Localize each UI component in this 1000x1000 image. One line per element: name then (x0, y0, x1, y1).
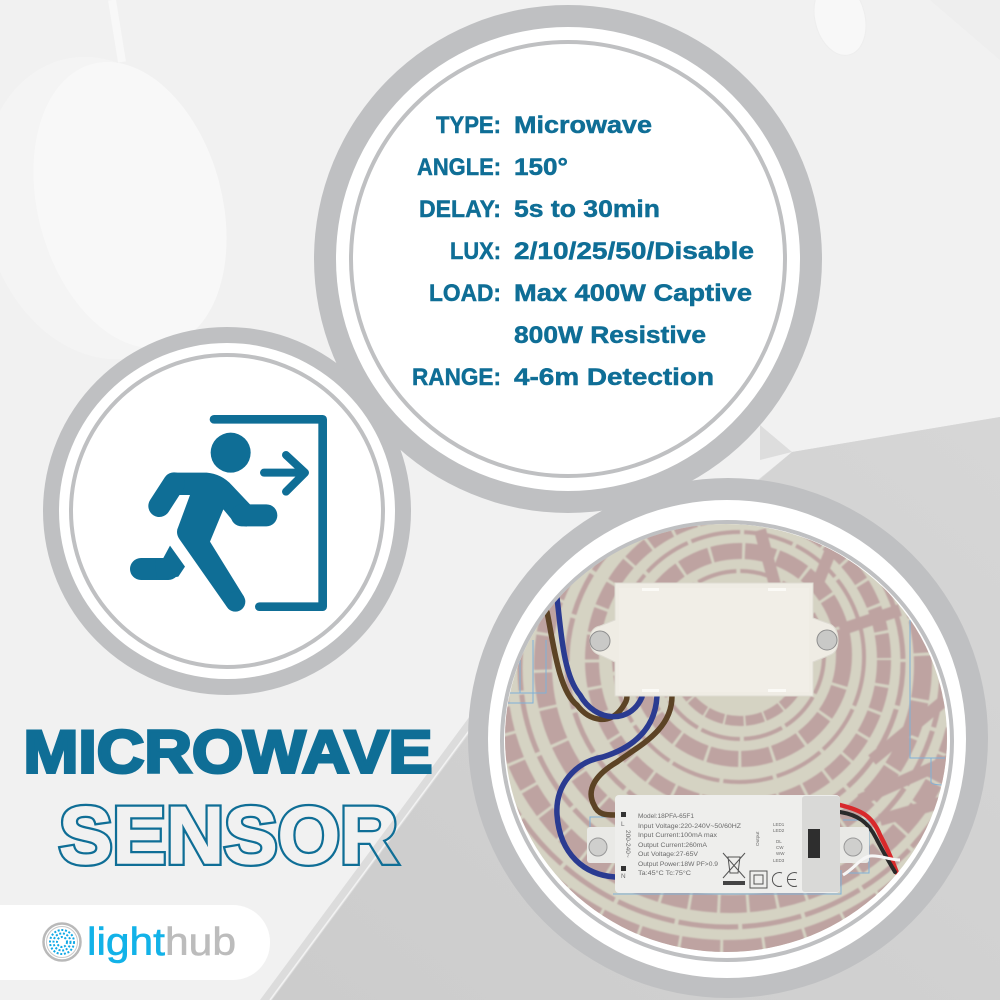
icon: running person leaving through door (141, 419, 323, 612)
panel: exit icon circle (43, 327, 411, 695)
specification labels: ANGLE: (417, 154, 501, 181)
driver label text: LED2 (773, 828, 785, 833)
driver label text: LED1 (773, 822, 785, 827)
nuts on bracket (589, 838, 607, 856)
driver white wire (843, 856, 900, 875)
icon: logo ring (44, 924, 80, 960)
specification labels (412, 112, 501, 391)
specification values: Max 400W Captive (514, 280, 752, 307)
panel: sensor specifications circle (314, 5, 822, 513)
driver label text: Ta:45°C Tc:75°C (638, 869, 691, 877)
blue outlines (508, 620, 945, 894)
specification values: Microwave (514, 112, 652, 139)
mounting bracket (587, 827, 869, 863)
driver label text: LED3 (773, 858, 785, 863)
driver label text: Output Power:18W PF>0.9 (638, 861, 718, 868)
driver label text: Input Current:100mA max (638, 832, 718, 839)
driver label text: L (621, 821, 625, 828)
specification values: 150° (514, 154, 568, 181)
specification values: 5s to 30min (514, 196, 660, 223)
logo wordmark: light (87, 921, 165, 964)
photo: microwave sensor board (505, 524, 947, 952)
specification labels: DELAY: (419, 196, 501, 223)
title: MICROWAVE: MICROWAVE (24, 718, 433, 786)
driver compliance marks (723, 853, 797, 888)
wires top (547, 598, 897, 877)
specification values (514, 112, 754, 391)
driver label text: Model:18PFA-65F1 (638, 813, 694, 820)
background lamp left (0, 0, 257, 385)
driver label text: 200-240~ (624, 830, 631, 858)
logo wordmark (87, 921, 236, 964)
enclosure box (590, 583, 838, 696)
driver label text: CW (776, 845, 784, 850)
specification labels: LUX: (450, 238, 501, 265)
logo wordmark: hub (165, 921, 236, 964)
driver label text: Output (755, 831, 761, 846)
LED driver box (615, 795, 840, 893)
title: SENSOR outlined: SENSOR (59, 791, 398, 881)
specification labels: TYPE: (436, 112, 501, 139)
driver label text: WW (776, 851, 785, 856)
specification values: 2/10/25/50/Disable (514, 238, 754, 265)
driver label text: Output Current:260mA (638, 842, 708, 849)
panel: sensor photo circle (468, 478, 988, 998)
circuit antenna pattern (505, 525, 947, 952)
driver label text (621, 813, 785, 880)
driver label text: Out Voltage:27-65V (638, 851, 699, 858)
specification values: 4-6m Detection (514, 364, 714, 391)
specification labels: LOAD: (429, 280, 501, 307)
driver label text: DL (776, 839, 782, 844)
specification values: 800W Resistive (514, 322, 706, 349)
logo: lighthub (0, 905, 270, 980)
driver label text: N (621, 873, 626, 880)
driver label text: Input Voltage:220-240V~50/60HZ (638, 823, 741, 830)
background lamp top right (807, 0, 873, 61)
specification labels: RANGE: (412, 364, 501, 391)
